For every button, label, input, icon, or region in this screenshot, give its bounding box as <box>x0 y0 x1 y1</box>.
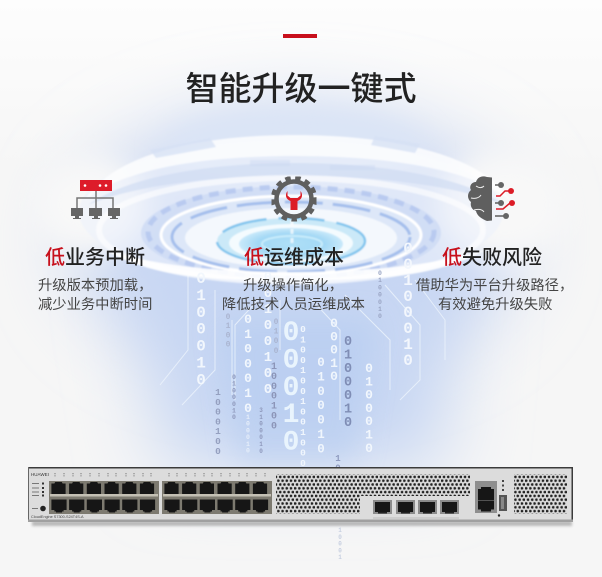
binary rain: 0100010 <box>376 270 384 320</box>
switch device <box>28 467 573 522</box>
ventilation mesh right <box>514 474 567 514</box>
ventilation mesh <box>276 474 470 514</box>
heading: 低失败风险 <box>442 246 542 269</box>
SFP ports <box>373 500 459 518</box>
description: 升级操作简化， <box>243 277 343 294</box>
binary rain: 0100010 <box>230 374 238 421</box>
description: 借助华为平台升级路径， <box>416 277 573 294</box>
port indicator marks <box>55 473 265 477</box>
binary rain: 00100100 <box>260 270 276 398</box>
binary rain: 00010 <box>276 318 306 455</box>
title: 智能升级一键式 <box>186 70 416 107</box>
USB port and LEDs <box>498 480 507 517</box>
description: 有效避免升级失败 <box>438 296 552 313</box>
icon: network server <box>71 180 120 219</box>
heading: 低业务中断 <box>45 246 145 269</box>
description: 升级版本预加载， <box>38 277 152 294</box>
device labels and status LEDs <box>31 472 84 519</box>
heading: 低运维成本 <box>244 246 344 269</box>
column: low operating cost <box>222 178 365 313</box>
binary rain: 0100 <box>272 318 280 356</box>
binary rain: 1000100 <box>268 362 280 431</box>
binary rain: 0100010 <box>192 270 210 388</box>
console and management ports <box>475 481 497 513</box>
binary rain: 10 <box>333 454 343 473</box>
icon: brain with nodes <box>468 176 515 221</box>
RJ45 port block 1 <box>49 481 159 514</box>
device labels and status LEDs: CloudEngine S7300-S24T4S-A <box>31 515 84 519</box>
binary rain: 3100010 <box>258 407 264 455</box>
binary rain <box>192 240 417 561</box>
description: 降低技术人员运维成本 <box>222 296 365 313</box>
binary rain: 00010 <box>326 316 342 383</box>
binary rain: 0100010 <box>314 356 328 457</box>
concentric data rings <box>79 135 510 284</box>
binary rain: 0100010 <box>362 361 376 454</box>
binary rain: 10001 <box>336 527 344 561</box>
red accent bar <box>283 34 317 38</box>
binary rain: 0100010 <box>340 335 356 430</box>
binary rain: 00100010 <box>399 240 417 368</box>
binary rain: 0100010 <box>240 312 256 416</box>
RJ45 port block 2 <box>162 481 272 514</box>
binary rain: 1000100 <box>212 387 224 456</box>
binary rain: 100010 <box>244 414 252 454</box>
circuit lines behind binary rain <box>160 275 445 420</box>
binary rain: 01001001001000 <box>298 324 308 468</box>
description: 减少业务中断时间 <box>38 296 152 313</box>
icon: gear and wrench <box>273 178 315 220</box>
binary rain: 0100 <box>224 313 232 350</box>
column: low service interruption <box>38 180 152 313</box>
column: low failure risk <box>416 176 573 313</box>
switch device shadow <box>32 521 572 526</box>
device labels and status LEDs: HUAWEI <box>31 472 49 477</box>
